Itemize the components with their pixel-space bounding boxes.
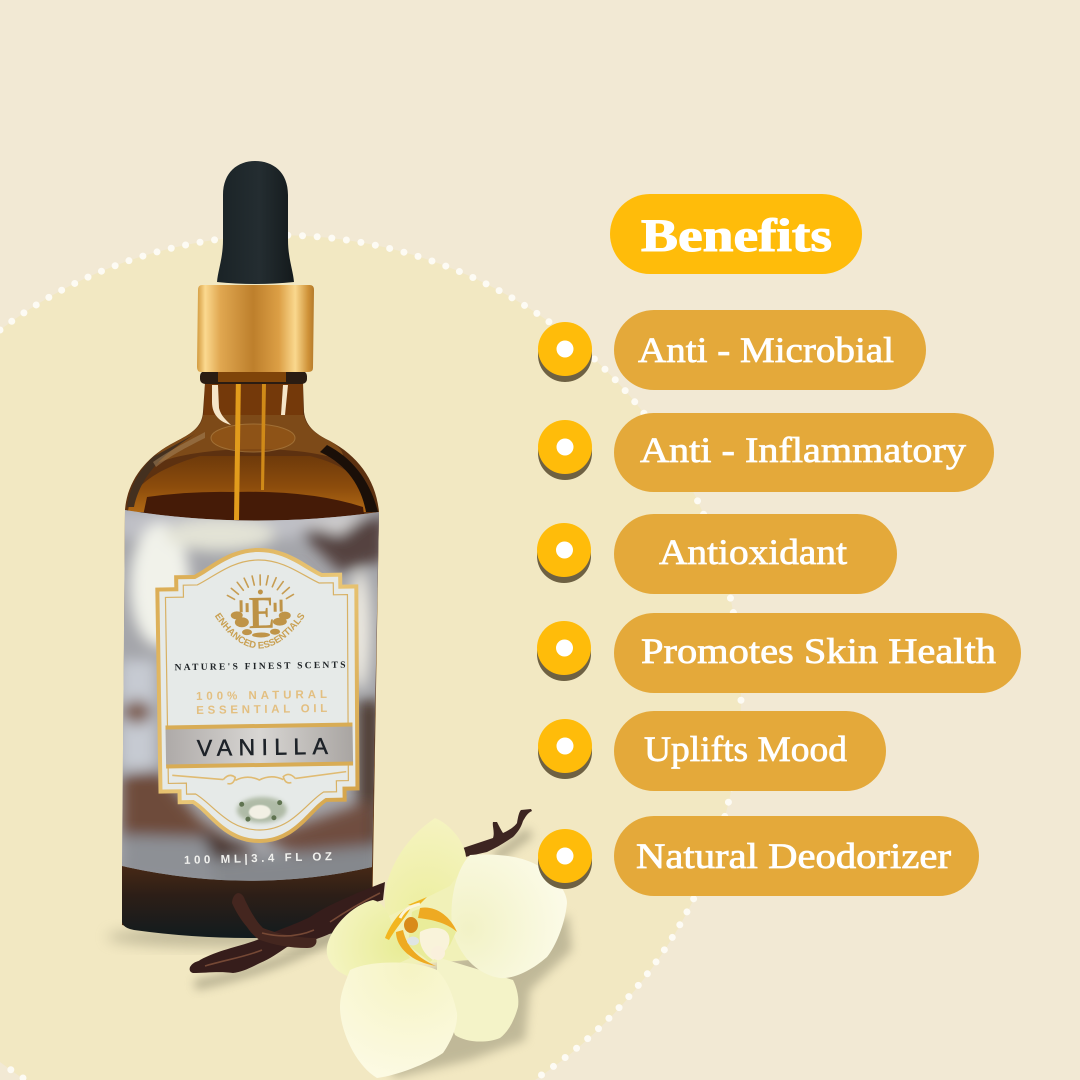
left petal — [327, 900, 410, 977]
vanilla pods — [190, 809, 532, 985]
logo letter: E — [248, 587, 275, 638]
right petal — [451, 854, 567, 978]
benefit: antioxidant — [614, 514, 897, 594]
benefits heading pill — [610, 194, 862, 274]
pod main — [190, 882, 385, 973]
benefit: anti microbial — [614, 310, 926, 390]
bullet 3 — [537, 523, 591, 583]
benefit: anti microbial: Anti - Microbial — [638, 330, 894, 370]
benefit: antioxidant: Antioxidant — [659, 532, 847, 572]
glass body — [122, 371, 379, 938]
flower shadow — [350, 915, 572, 1078]
bullet 6 — [538, 829, 592, 889]
orchid flower — [327, 818, 572, 1078]
gold front label — [155, 548, 360, 843]
dropper bulb — [217, 161, 294, 284]
gold label frame — [155, 546, 362, 845]
benefit: natural deodorizer — [614, 816, 979, 896]
flower backing — [385, 860, 470, 965]
logo rays — [227, 574, 293, 599]
bottom sepal — [340, 962, 457, 1078]
volume text: 100 ML|3.4 FL OZ — [184, 851, 332, 867]
benefit: anti inflammatory: Anti - Inflammatory — [640, 430, 966, 470]
label panel — [159, 550, 358, 841]
benefits heading pill: Benefits — [641, 210, 832, 262]
pod shadow — [195, 832, 530, 985]
bullet 2 — [538, 420, 592, 480]
dotted circle outline — [0, 235, 741, 1078]
bottom right sepal — [437, 957, 518, 1042]
reflection ring — [211, 424, 295, 452]
natural oil claim: 100% NATURAL — [196, 689, 327, 703]
bullet 5 — [538, 719, 592, 779]
pale shoulder band — [153, 432, 205, 467]
base glass — [122, 862, 372, 938]
floral sprig — [237, 797, 287, 823]
wrap label — [122, 510, 379, 881]
ornament — [172, 772, 346, 785]
bullet 4 — [537, 621, 591, 681]
neck lip — [200, 371, 307, 384]
product name band: VANILLA — [197, 733, 329, 761]
benefit: skin health — [614, 613, 1021, 693]
bottle — [108, 161, 379, 954]
logo wreath — [230, 589, 291, 638]
gold collar — [197, 285, 314, 372]
benefit: uplifts mood: Uplifts Mood — [644, 729, 847, 769]
pod side branch — [232, 893, 317, 948]
benefit: natural deodorizer: Natural Deodorizer — [636, 836, 951, 876]
benefit: uplifts mood — [614, 711, 886, 791]
dark left rim — [127, 434, 195, 507]
bullet 1 — [538, 322, 592, 382]
glass highlights — [212, 385, 231, 425]
top sepal — [385, 818, 466, 917]
dropper pipe streaks — [234, 372, 241, 520]
benefit: anti inflammatory — [614, 413, 994, 492]
essential oil line: ESSENTIAL OIL — [196, 703, 327, 717]
brand logo — [214, 574, 304, 649]
pod highlight — [205, 893, 380, 966]
amber liquid edge — [144, 492, 364, 520]
tagline: NATURE'S FINEST SCENTS — [174, 661, 346, 673]
product name band — [165, 723, 353, 768]
bottle ground shadow — [107, 927, 343, 947]
inner gold line — [165, 559, 351, 831]
circle backdrop — [0, 235, 741, 1080]
flower column — [385, 897, 457, 966]
pod upper stem — [463, 809, 532, 857]
logo wordmark: ENHANCED ESSENTIALS — [214, 612, 304, 649]
benefit: skin health: Promotes Skin Health — [641, 631, 996, 671]
dark right rim — [320, 445, 378, 512]
